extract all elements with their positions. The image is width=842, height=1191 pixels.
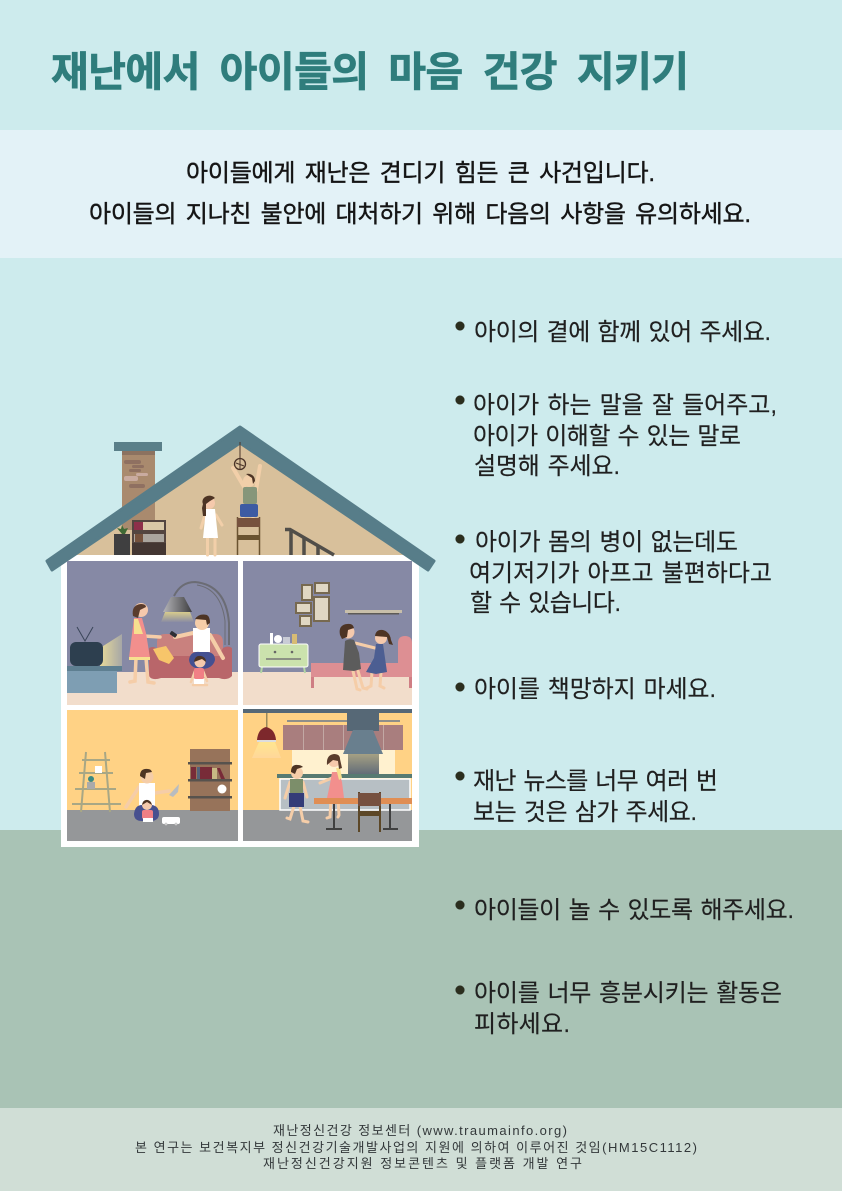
item 2: 아이가 이해할 수 있는 말로 bbox=[473, 423, 741, 450]
attic lamp bbox=[234, 442, 246, 470]
picture frames bbox=[296, 583, 329, 626]
dining table bbox=[314, 798, 412, 830]
item 6: 아이들이 놀 수 있도록 해주세요. bbox=[474, 897, 794, 924]
tile backsplash bbox=[292, 750, 395, 775]
room: bedroom bbox=[243, 561, 412, 705]
mother bbox=[129, 603, 160, 683]
range hood bbox=[343, 711, 383, 775]
sideboard bbox=[259, 633, 308, 673]
item 1: 아이의 곁에 함께 있어 주세요. bbox=[474, 319, 771, 346]
boy on chair bbox=[233, 466, 260, 555]
house frame bbox=[61, 555, 419, 847]
cabinets bbox=[283, 720, 403, 750]
advice list bbox=[456, 319, 794, 1038]
house illustration bbox=[47, 427, 434, 847]
roof bbox=[47, 427, 434, 570]
item 7: 피하세요. bbox=[474, 1011, 570, 1038]
footer: 본 연구는 보건복지부 정신건강기술개발사업의 지원에 의하여 이루어진 것임(HM15C1112) bbox=[135, 1140, 697, 1155]
footer bbox=[0, 1108, 842, 1191]
item 7: 아이를 너무 흥분시키는 활동은 bbox=[474, 980, 782, 1007]
room: living room bbox=[67, 561, 238, 705]
mother cooking bbox=[320, 754, 344, 818]
kitchen counter bbox=[277, 774, 412, 810]
television bbox=[67, 627, 122, 693]
item 3: 할 수 있습니다. bbox=[470, 590, 621, 617]
footer: 재난정신건강지원 정보콘텐츠 및 플랫폼 개발 연구 bbox=[263, 1156, 582, 1171]
tall bookshelf bbox=[188, 749, 232, 811]
father bbox=[169, 614, 223, 669]
father with baby bbox=[126, 769, 179, 822]
chimney bbox=[114, 442, 162, 530]
boy bbox=[285, 765, 308, 822]
title bbox=[0, 0, 842, 130]
baby bbox=[191, 656, 207, 685]
item 3 bbox=[456, 529, 772, 617]
item 5 bbox=[456, 768, 718, 826]
intro text block bbox=[0, 130, 842, 258]
chair bbox=[358, 792, 381, 832]
item 2: 설명해 주세요. bbox=[474, 453, 620, 480]
floor lamp bbox=[161, 582, 229, 645]
title: 재난에서 아이들의 마음 건강 지키기 bbox=[51, 49, 689, 95]
room: kitchen bbox=[243, 709, 412, 841]
attic wall bbox=[72, 440, 408, 556]
attic bookcase and plant bbox=[114, 520, 166, 555]
item 3: 여기저기가 아프고 불편하다고 bbox=[469, 560, 772, 587]
item 5: 보는 것은 삼가 주세요. bbox=[473, 799, 697, 826]
item 7 bbox=[456, 980, 782, 1038]
item 5: 재난 뉴스를 너무 여러 번 bbox=[473, 768, 718, 795]
footer: 재난정신건강 정보센터 (www.traumainfo.org) bbox=[273, 1123, 567, 1138]
item 2 bbox=[456, 392, 777, 480]
girl in attic bbox=[201, 496, 222, 555]
intro text block: 아이들에게 재난은 견디기 힘든 큰 사건입니다. bbox=[186, 160, 655, 187]
wall shelf bbox=[345, 610, 402, 614]
attic stairs bbox=[285, 530, 334, 555]
item 3: 아이가 몸의 병이 없는데도 bbox=[475, 529, 738, 556]
pendant lamp bbox=[252, 713, 281, 758]
bench sofa bbox=[311, 636, 412, 688]
item 4: 아이를 책망하지 마세요. bbox=[474, 676, 716, 703]
toy bus bbox=[162, 817, 180, 825]
room: play room bbox=[67, 710, 238, 841]
ladder shelf bbox=[72, 752, 121, 812]
sofa bbox=[149, 634, 232, 679]
item 2: 아이가 하는 말을 잘 들어주고, bbox=[473, 392, 777, 419]
mother and daughter bbox=[340, 624, 393, 690]
intro text block: 아이들의 지나친 불안에 대처하기 위해 다음의 사항을 유의하세요. bbox=[89, 201, 751, 228]
